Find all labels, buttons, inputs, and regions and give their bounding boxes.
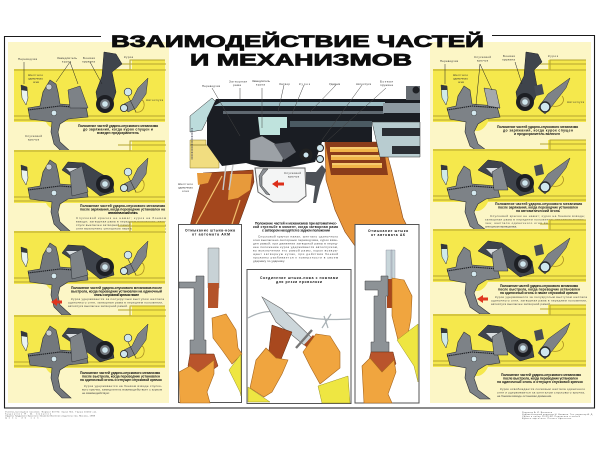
hammer xyxy=(516,52,542,104)
rifle part labels: Замедлитель xyxy=(252,79,270,83)
body text: чен; шептало одиночного огня выключено секторным xyxy=(485,221,585,225)
body text: не взаимодействует. xyxy=(82,391,110,395)
text block: rifle description: с затвором находятся в заднем положении xyxy=(262,228,330,232)
left hand xyxy=(250,348,288,397)
body text: Курок удерживается на боевом взводе спуско- xyxy=(84,384,162,388)
caption xyxy=(80,371,162,382)
caption: выстрела, когда переводчик установлен на одиночный xyxy=(71,290,162,294)
title: И МЕХАНИЗМОВ xyxy=(190,50,412,70)
caption: взведен предохранитель xyxy=(97,131,139,135)
part labels: Автоспуск xyxy=(567,100,585,104)
auto sear xyxy=(68,86,88,108)
trigger mechanism xyxy=(250,136,324,162)
magazine catch xyxy=(306,165,326,203)
sleeve xyxy=(229,354,241,396)
caption xyxy=(78,124,158,135)
body text: затворная рама в переднем положении, автоспуск выклю- xyxy=(485,218,585,222)
body text: одиночного огня, затворная рама в переднем положении, xyxy=(68,300,163,304)
caption xyxy=(498,284,580,295)
rifle part labels: Боевая xyxy=(380,80,393,84)
caption: Положение частей ударно-спускового механизма xyxy=(497,125,578,129)
label: trigger: Спусковой xyxy=(284,171,301,175)
rifle part labels: рама xyxy=(233,83,241,87)
rifle barrel and gas block xyxy=(179,276,206,354)
text block: rifle description: кой стрельбе в момент, когда затворная рама xyxy=(253,225,338,229)
handguard xyxy=(368,352,396,372)
magazine xyxy=(325,142,408,246)
caption xyxy=(71,286,162,297)
body text: спуск выключен затворной рамой; шептало одиночного xyxy=(76,223,166,227)
right hand xyxy=(212,314,242,364)
panel title: от автомата АК xyxy=(371,233,406,237)
part labels xyxy=(18,55,164,142)
body text: Спусковой крючок не нажат; курок на боевом xyxy=(76,216,166,220)
panel: removing bayonet from AK xyxy=(355,224,419,403)
panel title: для резки проволоки xyxy=(276,280,322,284)
caption xyxy=(80,204,165,215)
caption: Положение частей ударно-спускового механизма после xyxy=(71,286,162,290)
caption: Положение частей ударно-спускового механизма xyxy=(80,371,160,375)
text block: rifle description xyxy=(253,222,338,263)
handguard xyxy=(188,354,218,376)
barrel highlights xyxy=(214,86,420,157)
caption xyxy=(497,125,578,136)
right hand xyxy=(303,334,340,384)
part labels: Боевая xyxy=(83,56,95,60)
imprint right: Бумага офсетная. Печать офсетная. xyxy=(522,417,572,420)
panel: left mechanism 2, automatic fire xyxy=(14,141,166,238)
trigger xyxy=(259,169,270,195)
part labels: одиночного xyxy=(453,76,468,80)
panel: right mechanism 2, automatic fire xyxy=(433,140,586,233)
caption: на одиночный огонь и отпущен спусковой крючок xyxy=(80,378,162,382)
body text xyxy=(68,297,164,308)
panel title: Отмыкание штыка xyxy=(368,229,408,233)
left hand xyxy=(362,358,396,403)
magazine cartridges xyxy=(325,142,388,175)
bayonet handle xyxy=(387,279,397,308)
caption xyxy=(495,202,582,213)
trigger guard xyxy=(255,168,306,202)
body text: Курок удерживается за полукруглым выступом шептала xyxy=(495,295,587,299)
imprint right xyxy=(522,411,593,420)
body text xyxy=(485,214,585,228)
imprint left: Ордена Трудового Красного Знамени Военное издательство, Москва, 1988 xyxy=(5,416,96,418)
bayonet handle xyxy=(304,335,317,350)
caption: до заряжания, когда курок спущен xyxy=(503,128,573,132)
rifle part labels: Затворная xyxy=(229,80,247,84)
panel title xyxy=(260,276,338,284)
right hand xyxy=(392,278,412,340)
text block: rifle description: нее положение курок удерживается автоспуском, xyxy=(253,245,338,249)
caption: Положение частей ударно-спускового механизма xyxy=(495,202,582,206)
rifle part labels: Затвор xyxy=(279,82,290,86)
body text: взаимодействует. xyxy=(76,234,116,238)
panel: left mechanism 3, single fire trigger pressed xyxy=(14,222,166,315)
body text: одиночного огня, затворная рама в переднем положении, xyxy=(491,298,587,302)
body text xyxy=(491,295,587,306)
body text: секторном переводчика. xyxy=(485,224,517,228)
caption: после выстрела, когда переводчик установлен xyxy=(503,376,578,380)
body text: вого крючка, замедлитель взаимодействует с курком xyxy=(82,388,162,392)
part labels: Спусковой xyxy=(25,134,42,138)
rifle part labels: огня xyxy=(182,189,189,193)
caption: после заряжания, когда переводчик установлен на xyxy=(80,208,165,212)
caption: до заряжания, когда курок спущен и xyxy=(83,128,153,132)
caption: и предохранитель включен xyxy=(514,132,560,136)
part labels: Курок xyxy=(548,54,559,58)
part labels: огня xyxy=(458,80,464,84)
caption: Положение частей ударно-спускового механизма xyxy=(78,124,158,128)
part labels: Шептало xyxy=(28,73,43,77)
part labels: Автоспуск xyxy=(146,98,164,102)
caption: на автоматический огонь xyxy=(516,209,560,213)
part labels: Шептало xyxy=(453,73,468,77)
part labels xyxy=(440,54,585,104)
caption xyxy=(497,373,583,384)
body text: Курок удерживается за полукруглым выступом шептала xyxy=(71,297,164,301)
caption: на одиночный огонь и нажат спусковой крючок xyxy=(500,291,578,295)
part labels: огня xyxy=(33,80,39,84)
title: ВЗАИМОДЕЙСТВИЕ ЧАСТЕЙ xyxy=(111,32,484,51)
leader lines xyxy=(212,85,386,142)
caption: после выстрела, когда переводчик установлен xyxy=(498,288,580,292)
text block: rifle description: ден рамой; при движении затворной рамы в перед- xyxy=(253,242,338,246)
part labels: крючок xyxy=(28,138,40,142)
right sleeve xyxy=(318,376,350,403)
scabbard handle xyxy=(268,325,292,362)
rifle part labels: Ударник xyxy=(329,82,341,86)
part labels: Курок xyxy=(124,55,134,59)
imprint right: Редактор А. И. Васильев xyxy=(522,411,553,414)
part labels: пружина xyxy=(502,58,515,62)
imprint right: Художественный редактор Н. Новиков. Тех. редактор А. Д. xyxy=(522,413,593,416)
imprint left: Цена 40 коп. xyxy=(5,418,41,420)
right column panel background xyxy=(430,42,591,403)
body text: курка при нажатии на спусковой крючок с курком не xyxy=(76,230,166,234)
label: trigger xyxy=(284,171,301,178)
body text: взводе; затворная рама в переднем положении, авто- xyxy=(76,220,166,224)
panel title: Соединение штыка-ножа с ножнами xyxy=(260,276,338,280)
caption: огонь и спусковой крючок нажат xyxy=(94,293,139,297)
caption: после выстрела, когда переводчик установлен xyxy=(82,374,160,378)
caption: автоматический огонь xyxy=(108,211,138,215)
text block: rifle description: ударнику по ударнику. xyxy=(253,259,285,263)
panel title xyxy=(368,229,408,237)
caption: после заряжания, когда переводчик установлен xyxy=(498,206,578,210)
rifle part labels: одиночного xyxy=(178,186,193,190)
panel: left mechanism 1, before loading xyxy=(14,52,166,152)
text block: rifle description: пружины разбивается к поверхности в своем xyxy=(253,256,338,260)
part labels: Спусковой xyxy=(474,55,491,59)
panel title: Отмыкание штыка-ножа xyxy=(185,228,235,232)
part labels: Переводчик xyxy=(440,59,459,63)
text block: rifle description: Спусковой крючок нажат, шептало одиночного xyxy=(258,234,338,238)
part labels: Замедлитель xyxy=(57,56,77,60)
body text xyxy=(497,387,585,398)
imprint left: Учебно-наглядное пособие. Формат 60×90. Заказ №1. Тираж 10000 экз. xyxy=(5,410,97,414)
caption: на одиночный огонь и отпущен спусковой крючок xyxy=(497,380,583,384)
imprint left xyxy=(5,410,97,420)
rifle part labels: Курок xyxy=(299,82,311,86)
panel: right mechanism 1, before loading xyxy=(433,52,586,153)
title xyxy=(111,32,484,70)
pistol grip xyxy=(190,165,254,226)
part labels: пружина xyxy=(82,60,95,64)
rifle part labels xyxy=(178,79,393,193)
panel: left mechanism 4, single fire trigger released xyxy=(14,306,166,398)
receiver xyxy=(207,99,420,167)
panel: assembling knife and sheath for cutting wire xyxy=(247,270,351,404)
part labels: Переводчик xyxy=(18,57,38,61)
sleeve xyxy=(397,324,418,382)
chart: rifle cross-section xyxy=(178,79,420,246)
rifle part labels: курка xyxy=(256,82,265,86)
part labels: Боевая xyxy=(503,54,515,58)
icon: red arrow xyxy=(272,180,284,188)
body text: огня и удерживается за шепталом спускового крючка, xyxy=(497,390,585,394)
text block: rifle description: огня выключено секторным переводчика, курок взве- xyxy=(253,238,338,242)
text block: rifle description: во выключении его рамой рамы, курок возвра- xyxy=(253,248,338,252)
text block: rifle description: Положение частей и механизмов при автоматичес- xyxy=(255,222,337,226)
body text: Спусковой крючок не нажат; курок на боевом взводе; xyxy=(490,214,585,218)
left sleeve xyxy=(248,387,270,402)
barbed wire xyxy=(248,311,350,328)
caption: Положение частей ударно-спускового механизма xyxy=(80,204,165,208)
body text xyxy=(76,216,166,238)
icon: red arrow xyxy=(51,298,62,306)
body text xyxy=(82,384,162,395)
bayonet blade xyxy=(208,248,219,288)
part labels: крючок xyxy=(477,58,489,62)
text block: rifle description: щает затворную кулак, при действии боевой xyxy=(253,252,338,256)
caption: Положение частей ударно-спускового механизма xyxy=(501,373,581,377)
imprint right: Сдано в набор 10.03.88. Подписано в печать xyxy=(522,416,581,418)
body text: автоспуск выключен затворной рамой. xyxy=(68,304,128,308)
panel: right mechanism 3, single fire trigger pressed xyxy=(433,220,587,314)
rifle part labels: Переводчик xyxy=(202,84,221,88)
rifle barrel and front sight xyxy=(365,276,389,352)
part labels: одиночного xyxy=(28,76,43,80)
body text: огня выключено секторном переводчика, замедлитель xyxy=(76,226,166,230)
barrel rods xyxy=(386,250,395,280)
rifle part labels: Автоспуск xyxy=(356,82,372,86)
label: trigger: крючок xyxy=(288,174,300,178)
bayonet handle xyxy=(208,283,219,308)
imprint left: Художник Н. А. Смирнов xyxy=(5,412,52,416)
panel title: от автомата АКМ xyxy=(192,232,230,236)
body text: Курок освобождается сосковым шептала одиночного xyxy=(500,387,585,391)
knife guard xyxy=(296,330,312,348)
knife blade xyxy=(262,297,312,345)
icon: red arrow xyxy=(477,295,488,303)
caption: Положение частей ударно-спускового механизма xyxy=(500,284,578,288)
panel title xyxy=(185,228,235,236)
panel: right mechanism 4, single fire trigger released xyxy=(433,305,586,399)
body text: автоспуск выключен затворной рамой. xyxy=(491,302,551,306)
left column panel background xyxy=(8,42,169,403)
left hand xyxy=(179,360,214,403)
panel: removing knife bayonet from AKM xyxy=(178,224,242,403)
hammer xyxy=(96,52,122,104)
body text: на боевом взводе остановки движения. xyxy=(497,394,552,398)
rifle part labels: пружина xyxy=(380,83,393,87)
rear stock block xyxy=(190,98,219,168)
rifle part labels: Шептало xyxy=(178,182,193,186)
part labels: курка xyxy=(62,60,71,64)
